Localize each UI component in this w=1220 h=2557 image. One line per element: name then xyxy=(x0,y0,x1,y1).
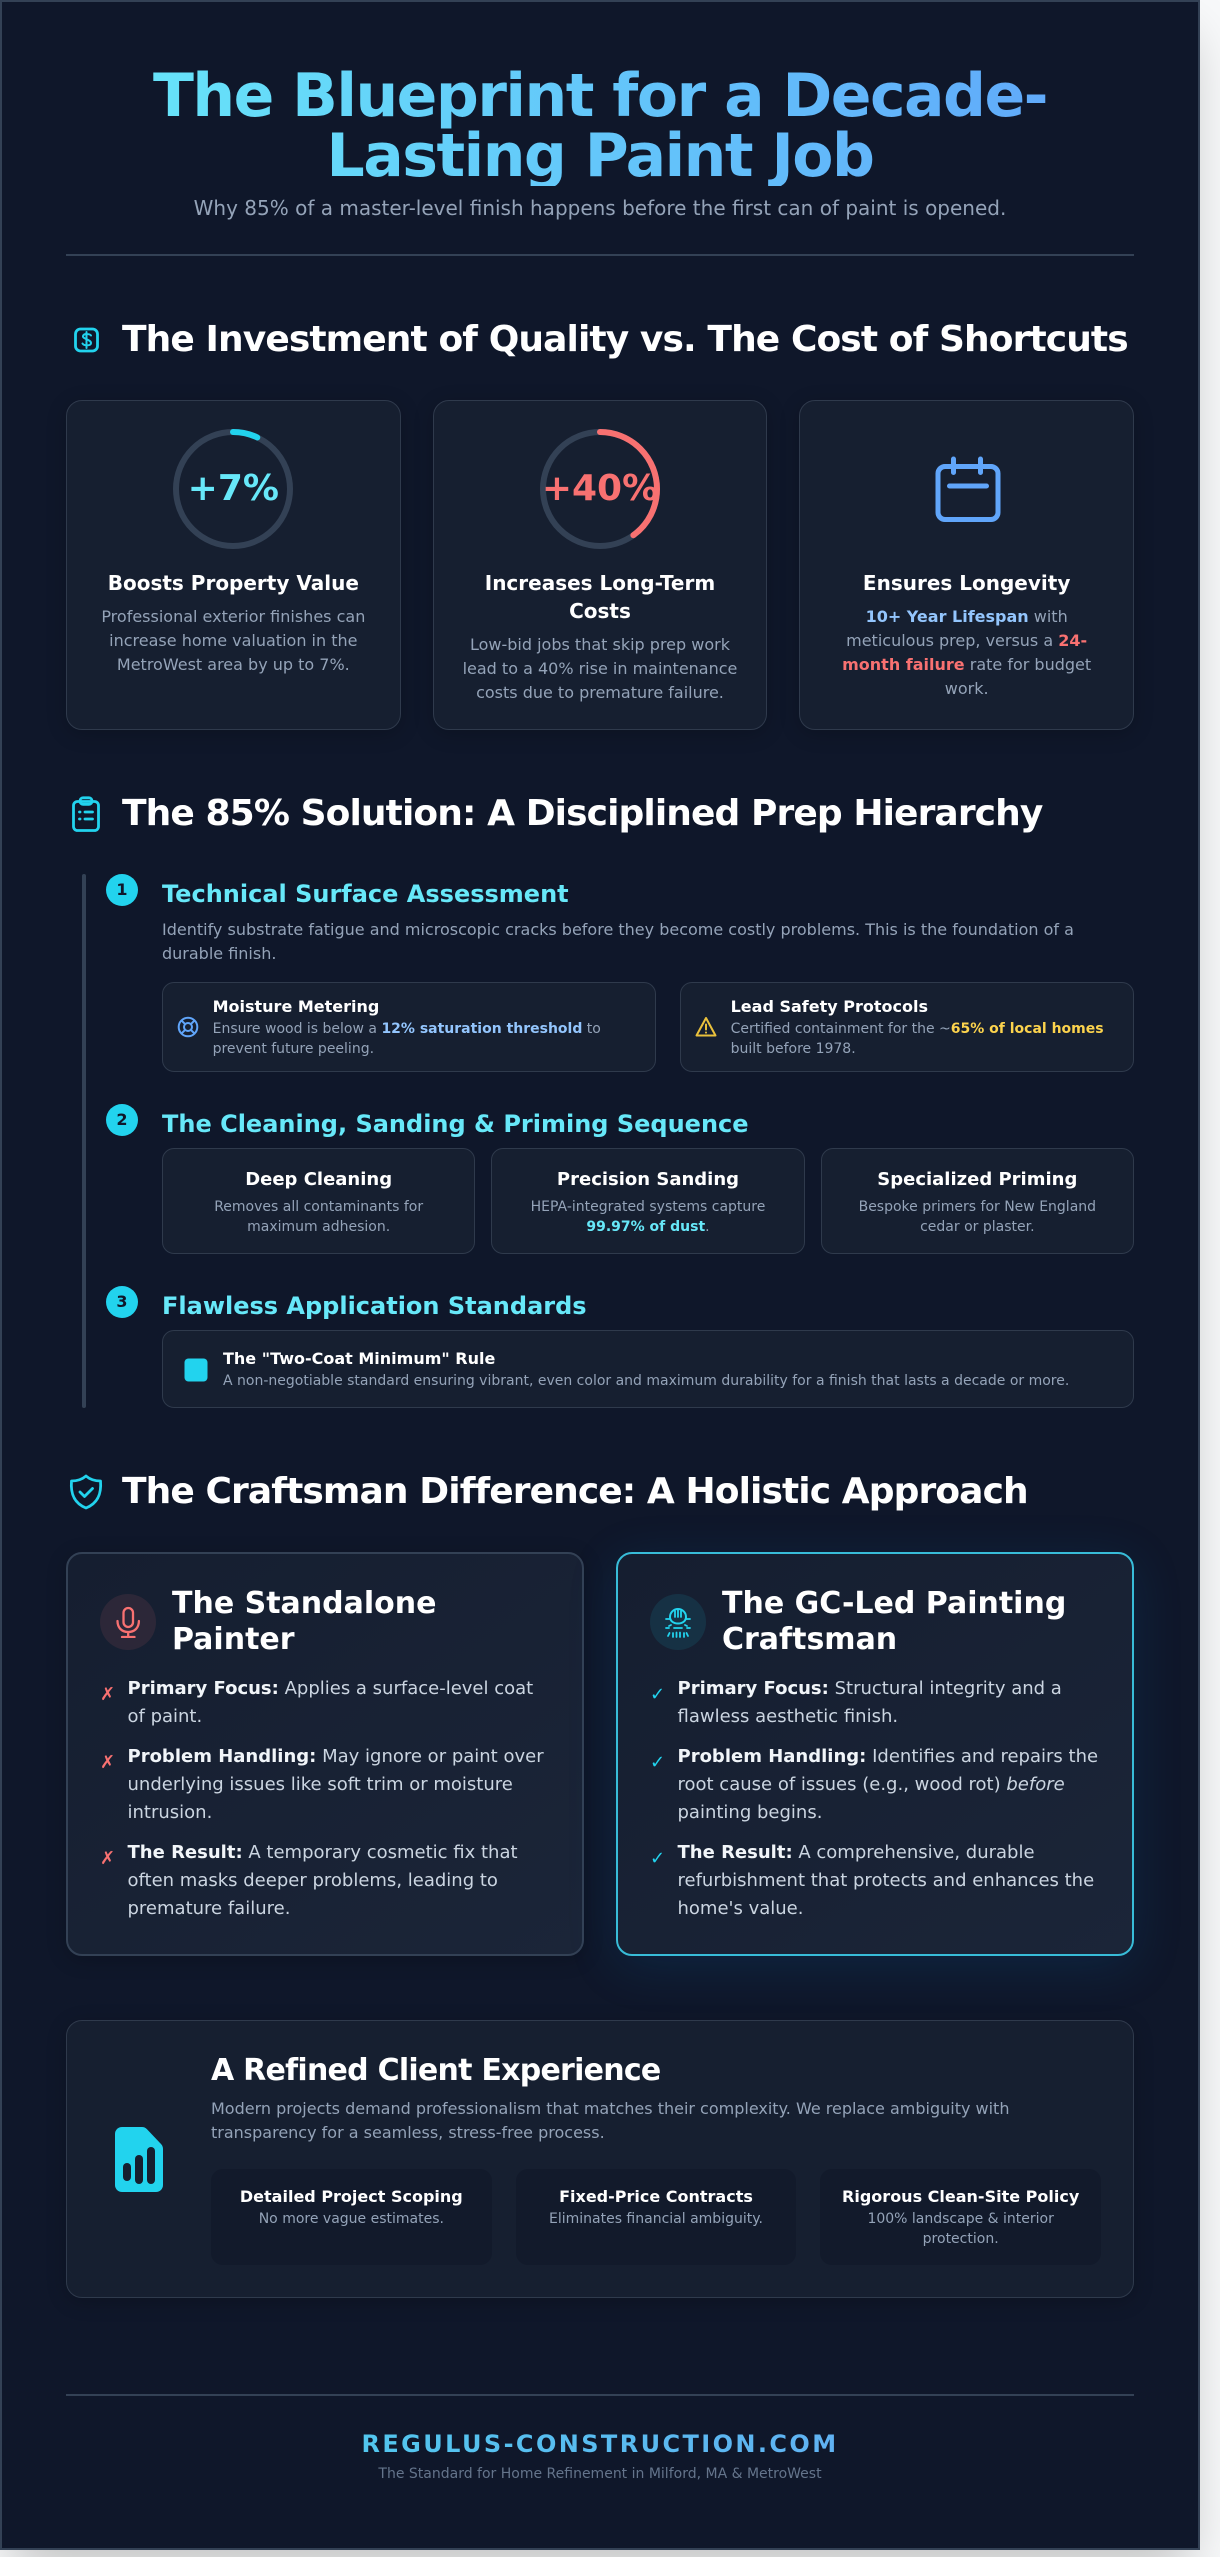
panel heading: The Standalone Painter xyxy=(172,1586,436,1657)
step 2 heading: The Cleaning, Sanding & Priming Sequence xyxy=(162,1110,749,1138)
step number 2 xyxy=(106,1104,138,1136)
card heading: Boosts Property Value xyxy=(108,571,359,595)
list: Primary Focus: Structural integrity and a flawless aesthetic finish. xyxy=(678,1678,1062,1727)
text: A non-negotiable standard ensuring vibrant, even color and maximum durability for a finish that lasts a decade or more. xyxy=(223,1373,1069,1389)
box: project scoping xyxy=(211,2169,492,2265)
text: Removes all contaminants for maximum adhesion. xyxy=(214,1199,423,1235)
card: property value xyxy=(66,400,401,730)
heading: Specialized Priming xyxy=(877,1169,1077,1190)
icon: clipboard xyxy=(72,796,100,832)
stat cards xyxy=(66,400,1134,730)
icon: document chart xyxy=(115,2127,163,2192)
panel text: Modern projects demand professionalism that matches their complexity. We replace ambiguity with transparency for a seamless, stress-free process. xyxy=(211,2099,1009,2142)
panel heading: A Refined Client Experience xyxy=(211,2053,660,2088)
sub card heading: Moisture Metering xyxy=(213,997,379,1016)
title: The Blueprint for a Decade-Lasting Paint Job xyxy=(153,61,1047,191)
list: ✓ xyxy=(650,1848,665,1869)
heading: Deep Cleaning xyxy=(245,1169,392,1190)
subtitle: Why 85% of a master-level finish happens before the first can of paint is opened. xyxy=(194,196,1006,220)
step number 1: 1 xyxy=(116,880,128,899)
icon: microphone xyxy=(100,1594,156,1650)
sub card: precision sanding xyxy=(491,1148,805,1254)
comparison xyxy=(66,1552,1141,1973)
sub card: lead safety xyxy=(680,982,1134,1072)
section heading: prep hierarchy xyxy=(72,793,1043,834)
step heading: Technical Surface Assessment xyxy=(162,880,569,908)
icon: calendar xyxy=(936,456,1000,522)
heading text: The Craftsman Difference: A Holistic Approach xyxy=(122,1471,1028,1512)
step number 2: 2 xyxy=(116,1110,128,1129)
box: fixed-price contracts xyxy=(516,2169,796,2265)
text: Bespoke primers for New England cedar or plaster. xyxy=(859,1199,1096,1235)
box: clean-site policy xyxy=(820,2169,1101,2265)
list: ✓ xyxy=(650,1684,665,1705)
card text: Low-bid jobs that skip prep work lead to a 40% rise in maintenance costs due to premature failure. xyxy=(463,635,737,702)
section heading: craftsman difference xyxy=(70,1471,1028,1512)
sub card text: Ensure wood is below a 12% saturation threshold to prevent future peeling. xyxy=(213,1021,601,1057)
card text: Professional exterior finishes can increase home valuation in the MetroWest area by up to 7%. xyxy=(101,607,365,674)
step number 1 xyxy=(106,874,138,906)
panel: standalone painter xyxy=(66,1552,584,1956)
timeline xyxy=(82,874,1134,1408)
step 1 xyxy=(162,880,1074,963)
icon: warning triangle xyxy=(696,1017,716,1036)
list: Problem Handling: May ignore or paint over underlying issues like soft trim or moisture intrusion. xyxy=(128,1746,544,1823)
card: longevity xyxy=(799,400,1134,730)
text: Eliminates financial ambiguity. xyxy=(549,2211,763,2227)
panel header xyxy=(100,1586,436,1657)
card text: 10+ Year Lifespan with meticulous prep, versus a 24-month failure rate for budget work. xyxy=(842,607,1091,698)
step text: Identify substrate fatigue and microscopic cracks before they become costly problems. This is the foundation of a durable finish. xyxy=(162,920,1074,963)
heading: The "Two-Coat Minimum" Rule xyxy=(223,1349,495,1368)
card heading: Increases Long-Term Costs xyxy=(485,571,715,623)
step number 3 xyxy=(106,1286,138,1318)
sub card heading: Lead Safety Protocols xyxy=(731,997,928,1016)
heading: Rigorous Clean-Site Policy xyxy=(842,2187,1079,2206)
tagline: The Standard for Home Refinement in Milford, MA & MetroWest xyxy=(378,2466,822,2482)
text: No more vague estimates. xyxy=(259,2211,444,2227)
icon: dollar receipt xyxy=(74,328,99,352)
ring chart: 7 percent: +7% xyxy=(188,468,279,509)
card heading: Ensures Longevity xyxy=(863,571,1070,595)
panel: GC-led craftsman xyxy=(616,1552,1134,1956)
list: Primary Focus: Applies a surface-level coat of paint. xyxy=(128,1678,533,1727)
icon: lifebuoy xyxy=(178,1016,198,1038)
list xyxy=(650,1678,1098,1919)
heading: Fixed-Price Contracts xyxy=(559,2187,753,2206)
footer xyxy=(66,2394,1134,2484)
icon: shield check xyxy=(70,1474,102,1510)
website: REGULUS-CONSTRUCTION.COM xyxy=(362,2430,838,2458)
heading text: The 85% Solution: A Disciplined Prep Hierarchy xyxy=(122,793,1042,834)
list: Problem Handling: Identifies and repairs the root cause of issues (e.g., wood rot) before painting begins. xyxy=(678,1746,1098,1823)
card: long-term costs xyxy=(433,400,767,730)
list: The Result: A temporary cosmetic fix that often masks deeper problems, leading to premature failure. xyxy=(128,1842,518,1919)
panel: refined client experience xyxy=(66,2020,1134,2298)
panel heading: The GC-Led Painting Craftsman xyxy=(722,1586,1066,1657)
sub card: two-coat rule xyxy=(162,1330,1134,1408)
list: ✓ xyxy=(650,1752,665,1773)
step 3 heading: Flawless Application Standards xyxy=(162,1292,587,1320)
list xyxy=(100,1678,544,1919)
sub card: moisture metering xyxy=(162,982,656,1072)
text: 100% landscape & interior protection. xyxy=(867,2211,1054,2247)
icon: cyan square xyxy=(184,1358,208,1382)
heading: Detailed Project Scoping xyxy=(240,2187,463,2206)
heading: Precision Sanding xyxy=(557,1169,739,1190)
icon: craftsman xyxy=(650,1594,706,1650)
ring chart: 40 percent: +40% xyxy=(542,468,658,509)
list: ✗ xyxy=(100,1684,115,1705)
list: ✗ xyxy=(100,1752,115,1773)
sub card: specialized priming xyxy=(821,1148,1134,1254)
ring chart: 7 percent xyxy=(173,429,293,549)
list: The Result: A comprehensive, durable refurbishment that protects and enhances the home's value. xyxy=(678,1842,1094,1919)
header xyxy=(66,66,1134,256)
text: HEPA-integrated systems capture 99.97% of dust. xyxy=(531,1199,765,1235)
sub card text: Certified containment for the ~65% of local homes built before 1978. xyxy=(731,1021,1104,1057)
section heading: investment xyxy=(74,319,1128,360)
panel header xyxy=(650,1586,1066,1657)
step number 3: 3 xyxy=(116,1292,128,1311)
sub card: deep cleaning xyxy=(162,1148,475,1254)
list: ✗ xyxy=(100,1848,115,1869)
ring chart: 40 percent xyxy=(540,429,660,549)
heading text: The Investment of Quality vs. The Cost of Shortcuts xyxy=(122,319,1128,360)
